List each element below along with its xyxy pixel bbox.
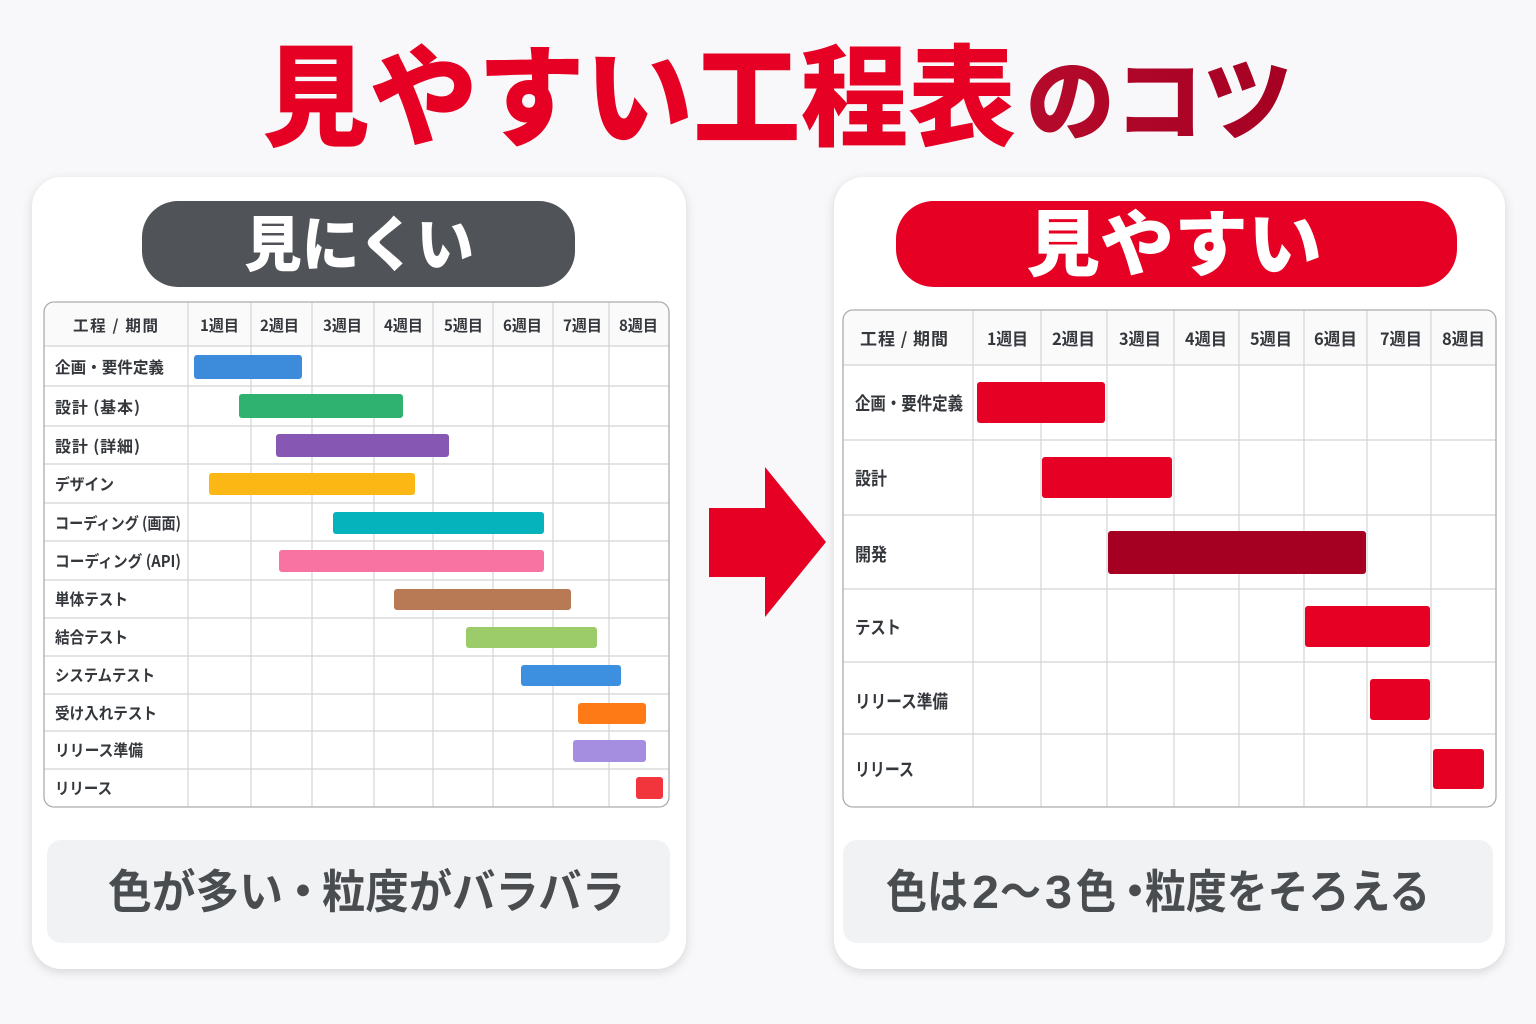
caption: bad example — [47, 840, 670, 943]
arrow — [709, 467, 826, 617]
caption: bad example: ・ — [280, 866, 326, 918]
row labels: コーディング (API) — [55, 548, 181, 572]
table header: 5週目 — [1250, 325, 1292, 350]
table header: 2週目 — [1052, 325, 1095, 350]
heading: 見にくい — [142, 197, 575, 287]
task bars — [194, 355, 663, 799]
row labels: リリース — [55, 775, 112, 799]
row labels: 開発 — [855, 541, 887, 567]
row labels — [855, 390, 963, 782]
table header: 7週目 — [563, 314, 602, 336]
task bars — [977, 382, 1484, 789]
caption: good example: ～ — [1000, 866, 1041, 918]
row labels: 結合テスト — [55, 624, 128, 648]
table header: 1週目 — [987, 325, 1028, 350]
heading: 見やすい: 見やすい — [1026, 186, 1322, 291]
row labels: デザイン — [55, 471, 114, 495]
table header: 7週目 — [1380, 325, 1422, 350]
row labels: 単体テスト — [55, 586, 128, 610]
row labels: 設計 — [855, 465, 887, 491]
heading: 見にくい: 見にくい — [244, 197, 474, 284]
panel: good example — [834, 177, 1505, 969]
table header: 6週目 — [1314, 325, 1357, 350]
table header: 4週目 — [384, 314, 423, 336]
table header: 2週目 — [260, 314, 299, 336]
caption: good example: 色は — [886, 866, 968, 918]
row labels: リリース準備 — [55, 737, 143, 761]
row labels: 受け入れテスト — [55, 700, 157, 724]
caption: bad example: 粒度がバラバラ — [322, 866, 625, 918]
row labels: システムテスト — [55, 662, 155, 686]
heading: 見やすい — [896, 186, 1457, 291]
table header: 6週目 — [503, 314, 542, 336]
row labels: 企画・要件定義 — [55, 354, 164, 378]
table header: 3週目 — [323, 314, 362, 336]
panel: bad example — [32, 177, 686, 969]
row labels: テスト — [855, 614, 901, 640]
table header: 3週目 — [1119, 325, 1161, 350]
table header — [860, 325, 1485, 350]
table header: 5週目 — [444, 314, 483, 336]
gantt chart: limited colors — [843, 310, 1496, 807]
caption: good example: 粒度をそろえる — [1145, 866, 1430, 918]
table header: 工程 / 期間 — [860, 325, 948, 350]
table header: 8週目 — [619, 314, 658, 336]
gantt chart: many colors — [44, 302, 669, 807]
row labels: リリース準備 — [855, 688, 948, 714]
row labels: 設計 (詳細) — [55, 433, 140, 457]
table header — [73, 314, 658, 336]
caption: good example: 色 — [1076, 866, 1116, 918]
caption: good example: 2 — [972, 866, 999, 918]
row labels: 企画・要件定義 — [855, 390, 963, 416]
table header: 1週目 — [200, 314, 239, 336]
row labels: リリース — [855, 756, 914, 782]
table header: 工程 / 期間 — [73, 314, 158, 336]
caption: bad example: 色が多い — [108, 866, 283, 918]
row labels: 設計 (基本) — [55, 394, 140, 418]
table header: 4週目 — [1185, 325, 1227, 350]
caption: good example: ・ — [1112, 866, 1158, 918]
row labels: コーディング (画面) — [55, 510, 181, 534]
caption: good example: 3 — [1045, 866, 1072, 918]
title: 見やすい工程表 — [262, 9, 1016, 169]
row labels — [55, 354, 181, 799]
caption: good example — [843, 840, 1493, 943]
title: のコツ — [1026, 29, 1292, 159]
table header: 8週目 — [1442, 325, 1485, 350]
